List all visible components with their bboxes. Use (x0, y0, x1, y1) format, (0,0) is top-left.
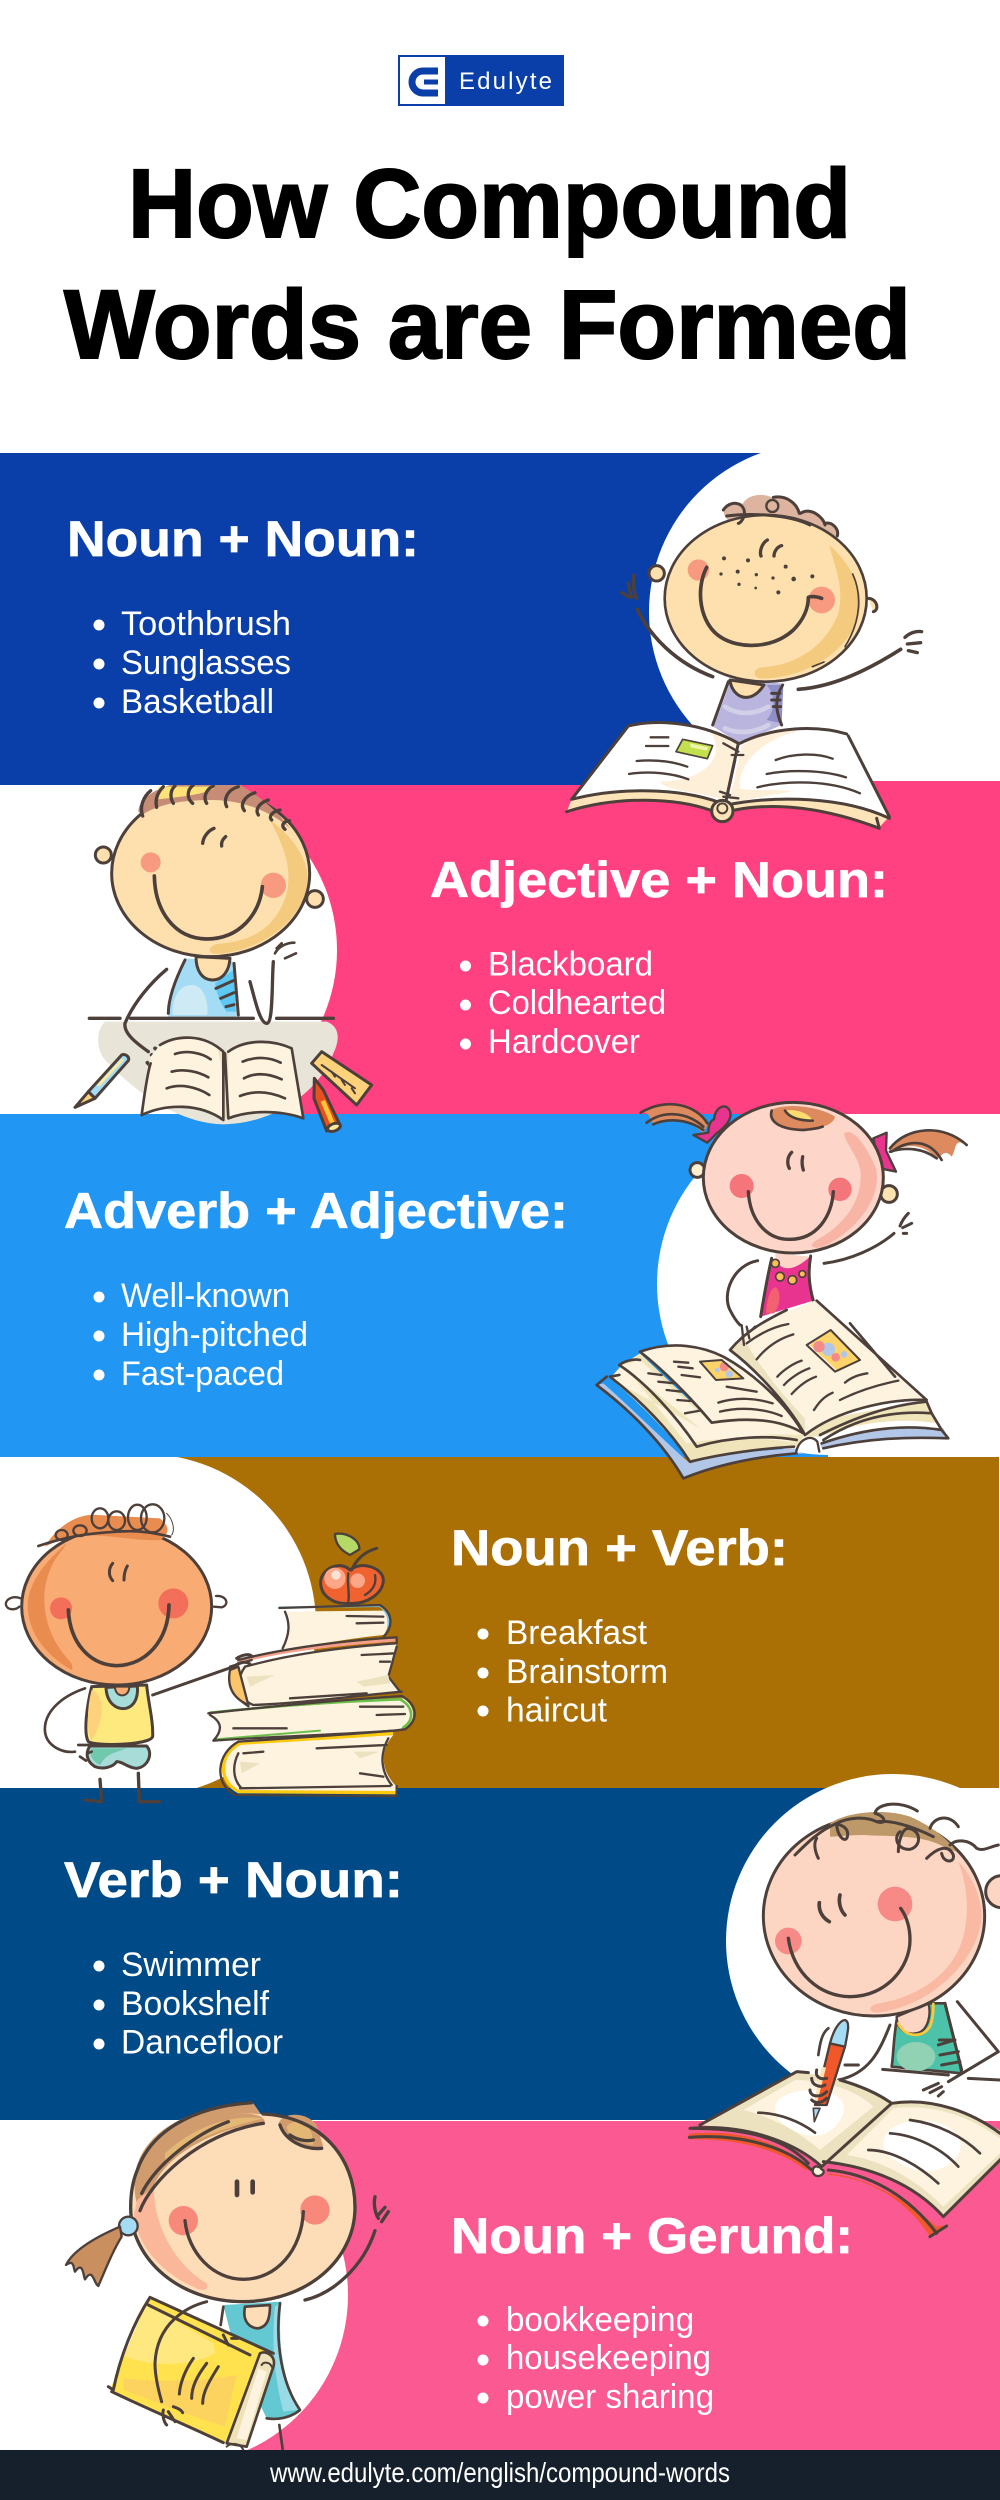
title: How Compound (128, 149, 851, 258)
title: Words are Formed (64, 270, 911, 379)
panel background: noun + gerund (8, 2121, 1000, 2465)
illustration: girl with pigtails reading big book (597, 1102, 967, 1478)
list: verb + noun examples: Bookshelf (121, 1985, 270, 2023)
list: noun + noun examples (94, 605, 291, 721)
list: verb + noun examples: Swimmer (121, 1946, 261, 1984)
list: adjective + noun examples: Coldhearted (488, 984, 666, 1022)
illustration: girl holding yellow book (66, 2103, 388, 2450)
list: noun + gerund examples: bookkeeping (506, 2301, 694, 2339)
illustration: boy with stack of books and apple (6, 1504, 415, 1802)
illustration: child writing with pen in open book (688, 1804, 1000, 2237)
list: noun + verb examples: Brainstorm (506, 1653, 668, 1691)
panel background: adverb + adjective (0, 1113, 999, 1457)
heading: adjective + noun: Adjective + Noun: (430, 852, 888, 908)
logo: Edulyte (459, 68, 552, 95)
panel background: verb + noun (0, 1774, 1000, 2120)
list: noun + noun examples: Toothbrush (121, 605, 291, 643)
heading: noun + noun: Noun + Noun: (67, 511, 419, 567)
title (64, 149, 911, 379)
list: noun + verb examples (478, 1614, 668, 1730)
list: adverb + adjective examples: High-pitched (121, 1316, 308, 1354)
list: noun + noun examples: Basketball (121, 683, 274, 721)
panel background: noun + verb (0, 1454, 999, 1796)
list: adverb + adjective examples (94, 1277, 308, 1393)
list: verb + noun examples: Dancefloor (121, 2024, 283, 2062)
list: noun + noun examples: Sunglasses (121, 644, 291, 682)
heading: noun + verb: Noun + Verb: (451, 1520, 788, 1576)
list: adjective + noun examples: Blackboard (488, 946, 653, 984)
list: adjective + noun examples (460, 946, 666, 1061)
logo (398, 55, 564, 106)
illustration: boy with open book (567, 495, 922, 828)
list: noun + gerund examples (478, 2301, 714, 2416)
list: adjective + noun examples: Hardcover (488, 1023, 640, 1061)
heading: adverb + adjective: Adverb + Adjective: (64, 1183, 568, 1239)
panel background: noun + noun (0, 443, 987, 785)
list: noun + gerund examples: housekeeping (506, 2339, 711, 2377)
list: adverb + adjective examples: Well-known (121, 1277, 290, 1315)
footer bar (0, 2450, 1000, 2500)
list: verb + noun examples (94, 1946, 283, 2062)
heading: noun + gerund: Noun + Gerund: (451, 2208, 853, 2264)
list: noun + verb examples: haircut (506, 1692, 608, 1730)
list: adverb + adjective examples: Fast-paced (121, 1355, 284, 1393)
footer bar: www.edulyte.com/english/compound-words (269, 2457, 730, 2488)
list: noun + gerund examples: power sharing (506, 2378, 714, 2416)
illustration: boy at desk with book (75, 785, 372, 1133)
list: noun + verb examples: Breakfast (506, 1614, 648, 1652)
panel background: adjective + noun (0, 781, 1000, 1119)
heading: verb + noun: Verb + Noun: (64, 1852, 403, 1908)
